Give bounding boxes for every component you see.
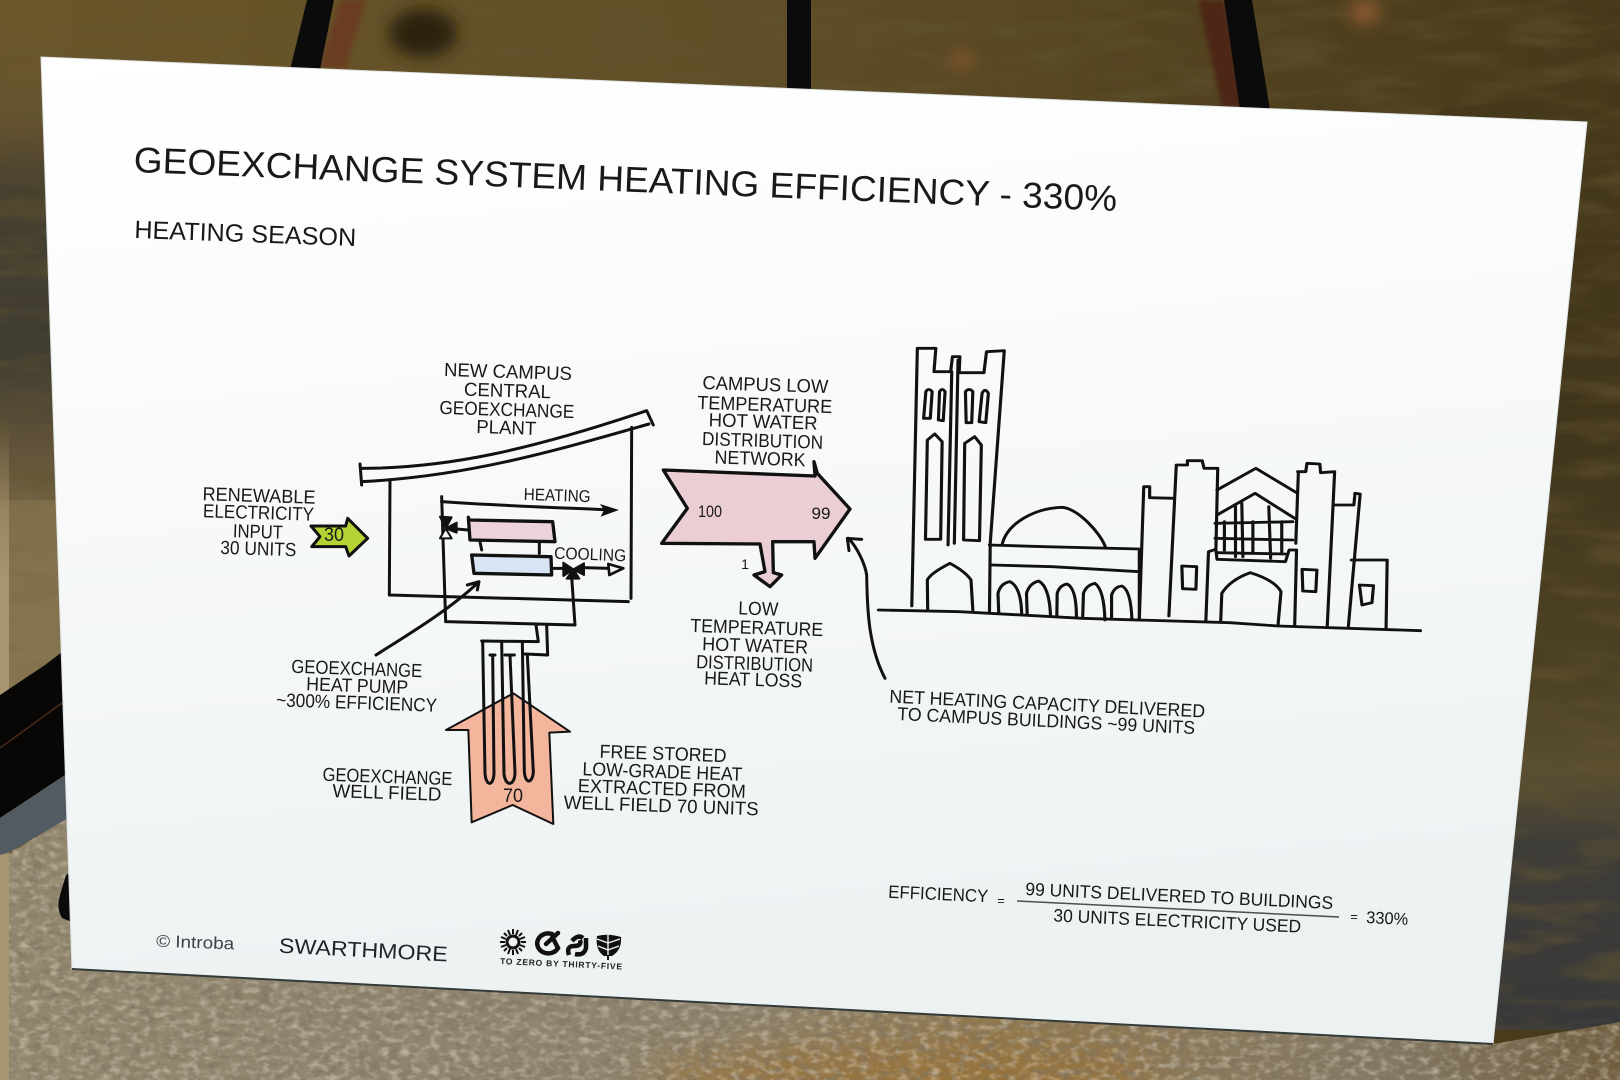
- subtitle: heating season: HEATING SEASON: [134, 216, 357, 252]
- gothic gatehouse building: [1139, 461, 1387, 628]
- credit: introba: © Introba: [156, 932, 235, 953]
- label: campus low temperature hot water distribution network: NETWORK: [714, 447, 806, 471]
- label: new campus central geoexchange plant: [438, 360, 576, 441]
- label: new campus central geoexchange plant: NEW CAMPUS: [444, 360, 572, 385]
- label: campus low temperature hot water distribution network: TEMPERATURE: [697, 393, 833, 418]
- logo: swarthmore: SWARTHMORE: [278, 935, 448, 966]
- result percentage: 330%: [1366, 908, 1409, 929]
- label: free stored low-grade heat: FREE STORED: [599, 742, 727, 767]
- label: low temperature hot water distribution heat loss: HEAT LOSS: [704, 668, 802, 692]
- label: low temperature hot water distribution heat loss: LOW: [738, 598, 779, 621]
- label: renewable electricity input: 30 UNITS: [220, 538, 297, 561]
- cooling output arrow: [583, 564, 623, 575]
- label: free stored low-grade heat: WELL FIELD 70 UNITS: [563, 793, 759, 820]
- label: campus low temperature hot water distribution network: CAMPUS LOW: [702, 373, 829, 398]
- numbers on the distribution arrow: [698, 502, 830, 572]
- building walls and floor: [389, 427, 632, 602]
- cooling valve: [563, 563, 584, 579]
- label: low temperature hot water distribution heat loss: TEMPERATURE: [690, 616, 824, 641]
- logo tagline: TO ZERO BY THIRTY-FIVE: [500, 956, 623, 972]
- label: geoexchange well field: GEOEXCHANGE: [322, 765, 453, 790]
- label: geoexchange well field: WELL FIELD: [332, 781, 442, 806]
- label: campus low temperature hot water distribution network: DISTRIBUTION: [702, 429, 823, 454]
- building roof: [360, 411, 653, 485]
- diagram: plant, heat pump and well field line art: [311, 411, 653, 824]
- title: GEOEXCHANGE SYSTEM HEATING EFFICIENCY - 330%: [133, 139, 1118, 219]
- heating output arrow: [442, 502, 619, 517]
- fraction bar: [1017, 901, 1339, 917]
- label: renewable electricity input: ELECTRICITY: [203, 501, 315, 526]
- pipes connecting components: [442, 497, 575, 655]
- numbers on the distribution arrow: 99: [812, 504, 830, 523]
- icon: power ring: [537, 933, 558, 953]
- label: low temperature hot water distribution heat loss: [688, 597, 824, 693]
- label: campus low temperature hot water distribution network: [695, 373, 833, 472]
- icon: sun: [500, 929, 526, 955]
- denominator: 30 UNITS ELECTRICITY USED: [1053, 905, 1302, 937]
- label: geoexchange well field: [322, 765, 453, 806]
- label: new campus central geoexchange plant: CENTRAL: [464, 380, 551, 403]
- arrow: pink distribution network flow: [662, 462, 850, 587]
- heat pump condenser: [468, 517, 555, 542]
- ground line: [878, 610, 1420, 631]
- clock tower: [912, 348, 1004, 612]
- logo: to zero by thirty-five: [500, 929, 623, 972]
- numbers on the distribution arrow: 100: [698, 502, 722, 521]
- icon: leaf: [597, 934, 621, 960]
- label: renewable electricity input: RENEWABLE: [202, 484, 316, 509]
- label: new campus central geoexchange plant: PLANT: [476, 417, 537, 440]
- label: free stored low-grade heat: LOW-GRADE HEAT: [582, 759, 743, 786]
- label: cooling: COOLING: [554, 544, 627, 565]
- arrow: net heating capacity pointer: [847, 538, 885, 678]
- heat pump evaporator: [472, 555, 552, 575]
- numerator: 99 UNITS DELIVERED TO BUILDINGS: [1025, 879, 1334, 913]
- illustration: campus buildings skyline: [878, 348, 1420, 631]
- label: net heating capacity delivered: NET HEATING CAPACITY DELIVERED: [889, 686, 1206, 721]
- label: campus low temperature hot water distribution network: HOT WATER: [708, 410, 818, 435]
- label: geoexchange heat pump: HEAT PUMP: [306, 674, 409, 699]
- icon: wave: [568, 937, 586, 955]
- label: net heating capacity delivered: [889, 686, 1206, 738]
- label: low temperature hot water distribution heat loss: HOT WATER: [702, 634, 808, 659]
- label: new campus central geoexchange plant: GEOEXCHANGE: [439, 398, 575, 423]
- label: geoexchange heat pump: ~300% EFFICIENCY: [276, 690, 438, 717]
- number: 30 units: 30: [324, 525, 344, 546]
- label: renewable electricity input: INPUT: [233, 521, 284, 544]
- label: heating: HEATING: [523, 485, 591, 506]
- number: 70 units: 70: [503, 786, 523, 807]
- domed arcade hall: [989, 507, 1139, 620]
- label: low temperature hot water distribution heat loss: DISTRIBUTION: [696, 652, 813, 677]
- heat pump pointer arrow: [376, 582, 479, 655]
- label: net heating capacity delivered: TO CAMPUS BUILDINGS ~99 UNITS: [897, 703, 1196, 738]
- label: free stored low-grade heat: EXTRACTED FROM: [577, 776, 746, 803]
- result: =: [1350, 909, 1358, 924]
- arrow: green electricity input: [311, 518, 368, 556]
- equals sign: =: [997, 893, 1005, 908]
- efficiency label: EFFICIENCY: [888, 882, 989, 906]
- numbers on the distribution arrow: 1: [741, 556, 749, 572]
- label: geoexchange heat pump: [276, 656, 439, 717]
- label: free stored low-grade heat: [563, 741, 761, 820]
- label: renewable electricity input: [201, 484, 316, 562]
- arrow: orange well field heat: [446, 693, 570, 824]
- label: geoexchange heat pump: GEOEXCHANGE: [291, 657, 423, 682]
- ground loop pipes: [483, 641, 533, 783]
- heating valve: [440, 517, 457, 538]
- equation: efficiency: [888, 879, 1409, 937]
